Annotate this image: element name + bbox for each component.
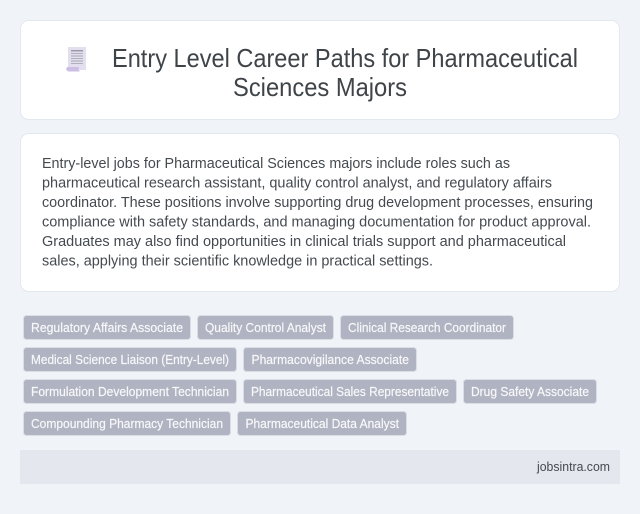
tag: Formulation Development Technician	[24, 380, 236, 404]
text block: description	[42, 155, 593, 270]
text block: description: sales, applying their scientific knowledge in practical settings.	[42, 252, 433, 270]
tag: Pharmaceutical Data Analyst: Pharmaceutical Data Analyst	[246, 416, 399, 431]
tag: Drug Safety Associate: Drug Safety Associate	[471, 384, 589, 399]
text block: description: compliance with safety standards, and managing documentation for product approval.	[42, 214, 591, 230]
tag list	[24, 316, 596, 436]
tag: Pharmacovigilance Associate	[244, 348, 416, 372]
tag: Clinical Research Coordinator: Clinical Research Coordinator	[348, 320, 507, 335]
tag: Regulatory Affairs Associate	[24, 316, 190, 340]
tag: Pharmaceutical Data Analyst	[238, 412, 406, 436]
tag: Formulation Development Technician: Formulation Development Technician	[31, 384, 229, 399]
tag: Drug Safety Associate	[464, 380, 596, 404]
footer	[20, 450, 620, 484]
title: Entry Level Career Paths for Pharmaceutical	[112, 43, 578, 73]
tag: Compounding Pharmacy Technician: Compounding Pharmacy Technician	[31, 416, 223, 431]
tag: Compounding Pharmacy Technician	[24, 412, 230, 436]
panel: description	[20, 134, 620, 292]
text block: description: Entry-level jobs for Pharmaceutical Sciences majors include roles such as	[42, 155, 510, 172]
footer: jobsintra.com	[536, 459, 610, 474]
tag: Quality Control Analyst	[198, 316, 334, 340]
tag: Pharmaceutical Sales Representative: Pharmaceutical Sales Representative	[251, 384, 449, 399]
text block: description: pharmaceutical research assistant, quality control analyst, and regulatory affairs	[42, 174, 552, 192]
tag: Pharmacovigilance Associate: Pharmacovigilance Associate	[252, 352, 409, 367]
tag: Pharmaceutical Sales Representative	[244, 380, 456, 404]
panel: header	[20, 20, 620, 120]
tag: Medical Science Liaison	[24, 348, 236, 372]
text block: description: Graduates may also find opportunities in clinical trials support and pharmaceutical	[42, 233, 566, 250]
title: Sciences Majors	[233, 72, 407, 102]
tag: Regulatory Affairs Associate: Regulatory Affairs Associate	[31, 320, 183, 335]
text block: description: coordinator. These positions involve supporting drug development processes, ensuring	[42, 194, 593, 211]
icon: document scroll	[66, 47, 86, 72]
tag: Quality Control Analyst: Quality Control Analyst	[205, 320, 326, 335]
tag: Medical Science Liaison: Medical Science Liaison (Entry-Level)	[31, 352, 229, 367]
tag: Clinical Research Coordinator	[340, 316, 514, 340]
title	[112, 43, 578, 102]
